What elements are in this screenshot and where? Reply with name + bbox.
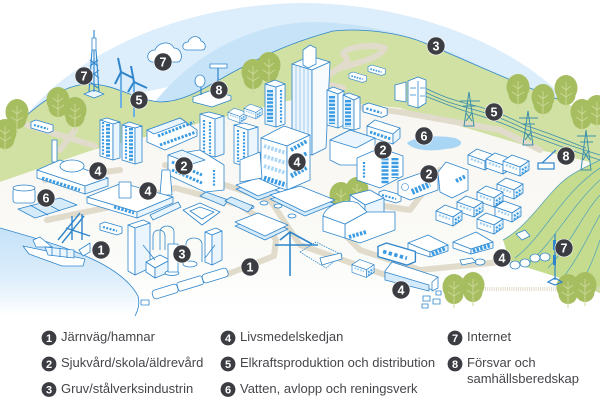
map number markers: 8 <box>216 84 223 98</box>
map number markers: 6 <box>43 192 50 206</box>
power pylons and wires <box>425 88 600 170</box>
mining trucks <box>349 65 386 82</box>
legend item 5: 5 <box>225 359 231 371</box>
map number markers: 7 <box>561 242 568 256</box>
harbour crane <box>58 213 90 243</box>
icon: wind turbines <box>115 58 147 117</box>
legend item 2: 2 <box>46 359 52 371</box>
map number markers: 1 <box>247 260 254 274</box>
map number markers: 3 <box>179 248 186 262</box>
big building with blue base <box>261 126 310 190</box>
food factory with silo <box>87 170 181 220</box>
legend item 6: 6 <box>225 384 231 396</box>
map number markers: 1 <box>98 244 105 258</box>
transport trucks <box>31 103 401 235</box>
map number markers: 2 <box>380 144 387 158</box>
blue-faced tower <box>265 80 285 127</box>
clouds <box>148 37 205 62</box>
map number markers: 7 <box>160 56 167 70</box>
map number markers: 8 <box>563 150 570 164</box>
green hill <box>0 30 600 182</box>
map number markers: 7 <box>81 70 88 84</box>
low office <box>367 120 400 144</box>
legend item 2: Sjukvård/skola/äldrevård <box>61 355 203 370</box>
map number markers: 6 <box>421 130 428 144</box>
legend item 8: 8 <box>452 359 458 371</box>
icon: mobile crane <box>538 150 556 169</box>
farm field <box>503 160 600 293</box>
map number markers <box>37 37 575 299</box>
barn <box>385 262 438 291</box>
legend <box>42 329 579 397</box>
map number markers: 4 <box>95 164 102 178</box>
map number markers: 5 <box>491 106 498 120</box>
trees <box>0 52 600 308</box>
sky arc inner band <box>150 22 500 108</box>
apartment block <box>200 112 224 157</box>
legend item 5: Elkraftsproduktion och distribution <box>240 355 435 370</box>
twin blocks right <box>327 87 360 130</box>
icon: defence radar <box>193 64 231 107</box>
icon: farm mast <box>548 234 562 285</box>
central skyscraper <box>292 45 330 155</box>
map number markers: 3 <box>433 40 440 54</box>
mine and steel works <box>128 220 222 278</box>
residential blocks on hill <box>395 77 426 108</box>
legend item 7 <box>448 329 511 345</box>
courtyard building <box>183 203 220 225</box>
roads <box>27 46 600 289</box>
hospital building <box>330 130 403 188</box>
map number markers: 4 <box>145 184 152 198</box>
fenced yard <box>300 242 342 268</box>
map number markers: 5 <box>136 94 143 108</box>
freight train <box>141 267 229 305</box>
warehouse hall <box>323 190 395 243</box>
hospital left <box>168 150 224 192</box>
legend item 8 <box>448 355 579 386</box>
map number markers: 2 <box>426 168 433 182</box>
water <box>0 228 139 316</box>
legend item 3: Gruv/stålverksindustrin <box>61 381 193 396</box>
shoreline <box>0 228 139 316</box>
pond <box>407 136 461 150</box>
legend item 7: 7 <box>452 333 458 345</box>
legend item 8: samhällsberedskap <box>467 371 579 386</box>
legend item 8: Försvar och <box>467 355 536 370</box>
hill outline <box>27 30 560 115</box>
warehouses <box>408 232 493 257</box>
city hospital right <box>398 162 468 200</box>
map number markers: 4 <box>398 284 405 298</box>
apartment block with small houses <box>228 104 262 167</box>
city ground <box>0 98 590 310</box>
freight ship <box>23 237 90 266</box>
legend item 3: 3 <box>46 384 52 396</box>
passenger train <box>200 192 253 212</box>
tanker truck <box>378 243 415 265</box>
map number markers: 4 <box>499 252 506 266</box>
map number markers: 4 <box>294 156 301 170</box>
icon: antenna mast <box>84 30 104 98</box>
lower city pavilions <box>235 152 335 240</box>
construction crane <box>275 232 318 276</box>
small farm house <box>352 260 374 277</box>
legend item 6: Vatten, avlopp och reningsverk <box>240 381 418 396</box>
farm vehicles <box>460 230 550 269</box>
sky arc <box>26 3 566 116</box>
legend item 1: Järnväg/hamnar <box>61 329 156 344</box>
food factory <box>37 140 108 194</box>
grazing animals <box>422 291 441 308</box>
long office building <box>147 118 197 150</box>
map number markers: 2 <box>181 160 188 174</box>
legend item 4: Livsmedelskedjan <box>240 329 343 344</box>
legend item 7: Internet <box>467 329 511 344</box>
legend item 1: 1 <box>46 333 52 345</box>
water tank and basins <box>13 185 77 218</box>
tower blocks left <box>100 118 142 164</box>
rail track <box>485 287 600 291</box>
houses <box>436 149 529 234</box>
legend item 4: 4 <box>225 333 232 345</box>
